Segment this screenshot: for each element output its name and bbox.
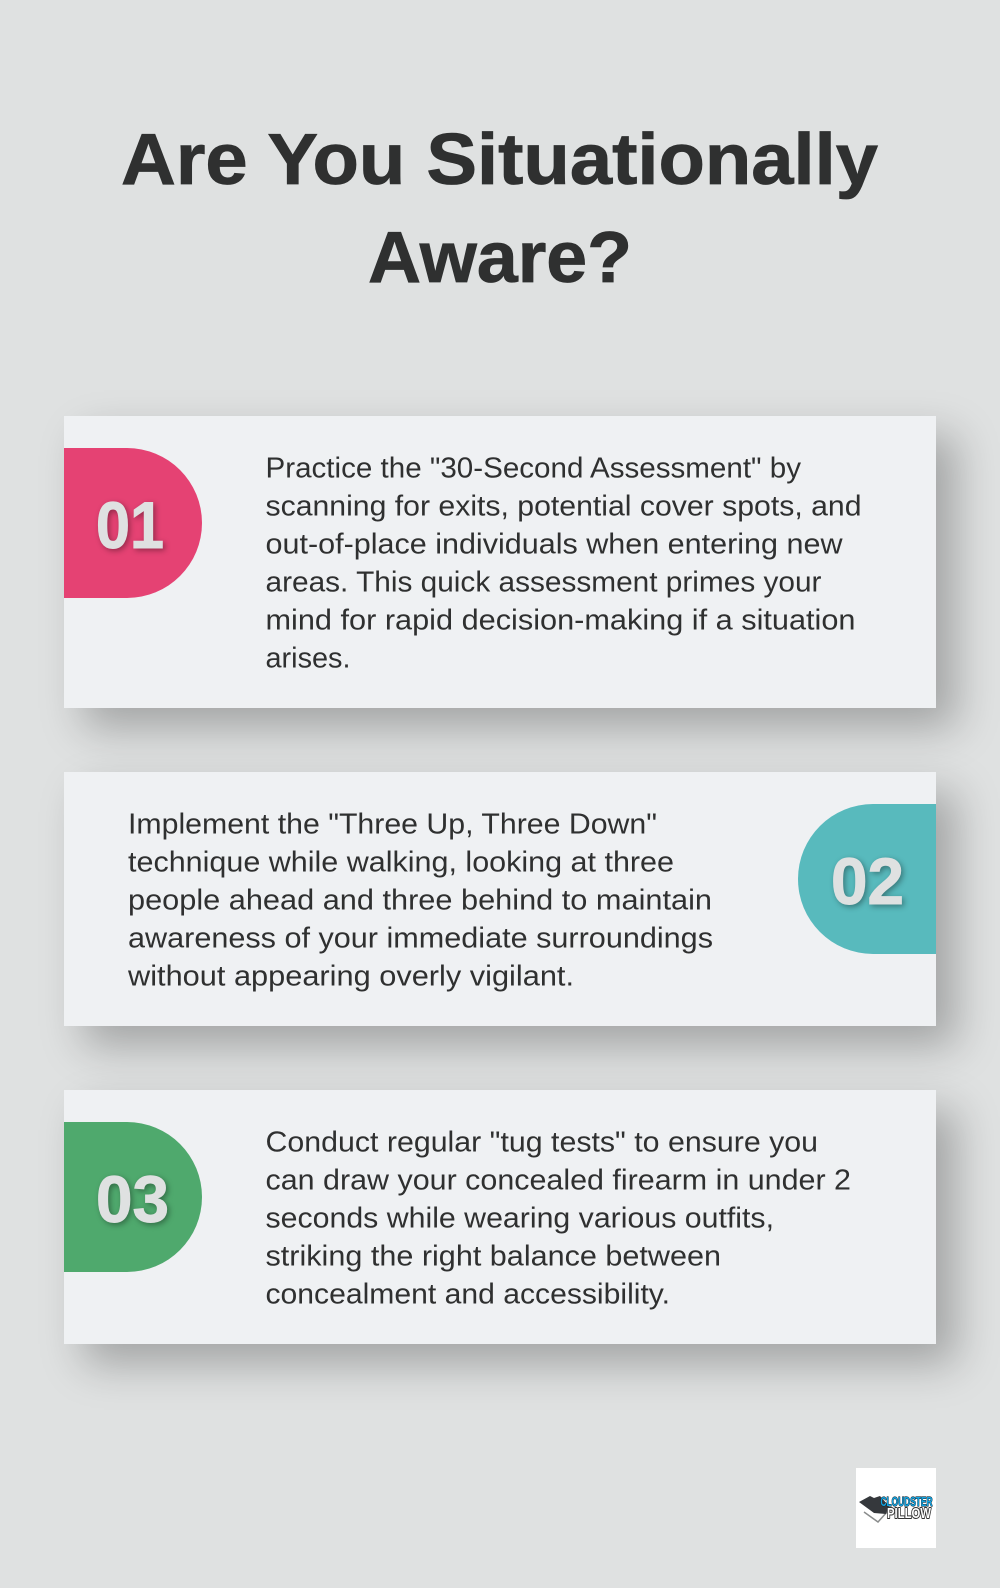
badge: 02: [798, 804, 936, 954]
text: step 1 description: scanning for exits, potential cover spots, and: [266, 490, 862, 522]
panel: step 2 card: [64, 772, 936, 1026]
logo: Cloudster Pillow: [856, 1468, 936, 1548]
text: step 1 description: out-of-place individuals when entering new: [266, 528, 844, 560]
panel: step 1 card: [64, 416, 936, 708]
icon: pillow: [859, 1496, 889, 1514]
text: step 2 description: Implement the "Three Up, Three Down": [128, 808, 657, 840]
logo wordmark: [880, 1495, 932, 1522]
text: step 2 description: [127, 808, 713, 992]
panel: step 3 card: [64, 1090, 936, 1344]
badge: 02: 02: [831, 844, 904, 918]
text: step 2 description: people ahead and three behind to maintain: [128, 884, 712, 916]
text: step 3 description: seconds while wearing various outfits,: [266, 1202, 774, 1234]
text: step 2 description: technique while walking, looking at three: [128, 846, 674, 878]
text: step 3 description: [266, 1126, 851, 1310]
text: step 1 description: Practice the "30-Second Assessment" by: [266, 452, 801, 484]
text: step 1 description: [266, 452, 862, 674]
title: [121, 120, 878, 298]
title: Aware?: [368, 218, 632, 298]
badge: 03: 03: [96, 1162, 169, 1236]
text: step 1 description: arises.: [266, 642, 350, 674]
text: step 2 description: without appearing overly vigilant.: [127, 960, 574, 992]
text: step 3 description: striking the right balance between: [266, 1240, 721, 1272]
logo wordmark: PILLOW: [887, 1506, 931, 1522]
text: step 3 description: concealment and accessibility.: [266, 1278, 670, 1310]
text: step 3 description: Conduct regular "tug tests" to ensure you: [266, 1126, 818, 1158]
badge: 01: [64, 448, 202, 598]
text: step 3 description: can draw your concealed firearm in under 2: [266, 1164, 851, 1196]
badge: 01: 01: [96, 488, 164, 562]
title: Are You Situationally: [121, 120, 878, 200]
logo wordmark: CLOUDSTER: [880, 1495, 932, 1509]
text: step 1 description: areas. This quick assessment primes your: [266, 566, 822, 598]
badge: 03: [64, 1122, 202, 1272]
icon: checkmark under pillow: [864, 1512, 887, 1522]
text: step 1 description: mind for rapid decision-making if a situation: [266, 604, 856, 636]
text: step 2 description: awareness of your immediate surroundings: [128, 922, 713, 954]
